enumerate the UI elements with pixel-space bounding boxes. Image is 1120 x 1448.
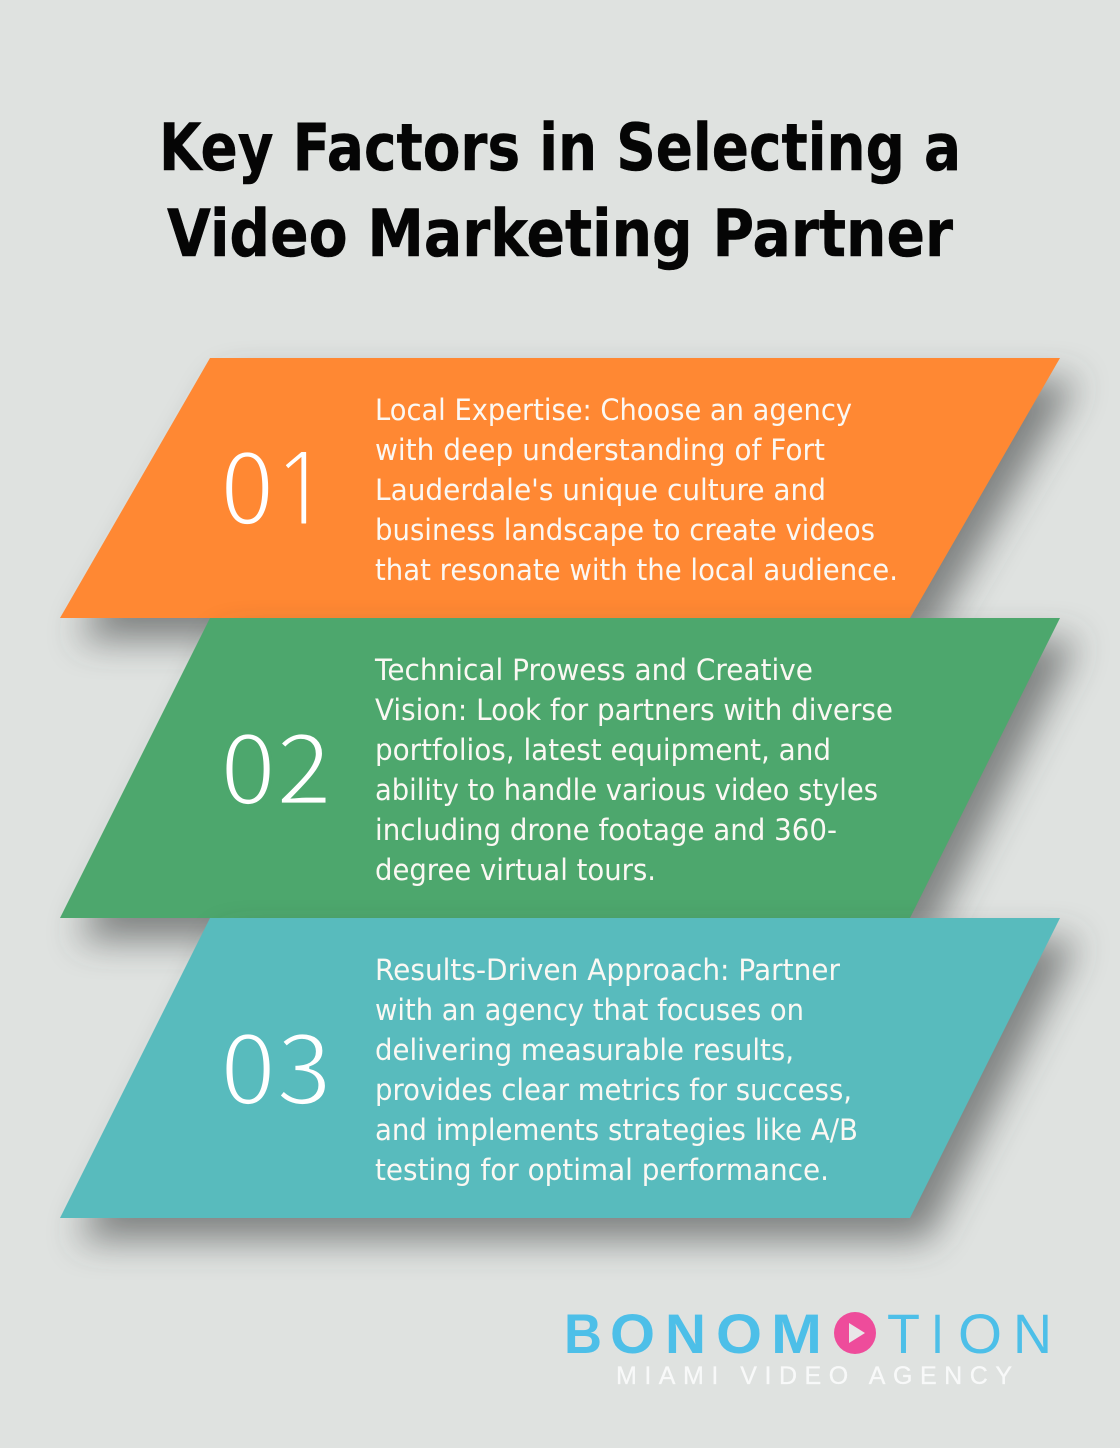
logo: bonomotion: O [716,1302,762,1365]
logo: bonomotion: B [564,1302,602,1365]
logo: bonomotion: O [958,1302,1002,1365]
text: local expertise: Lauderdale's unique culture and [375,473,826,507]
text: results-driven: testing for optimal performance. [375,1153,829,1187]
text: results-driven: provides clear metrics for success, [375,1073,852,1107]
text: results-driven: with an agency that focuses on [375,993,804,1027]
number 01: 1 [271,441,330,539]
text: technical prowess: Vision: Look for partners with diverse [375,693,893,727]
number 03: 03 [220,991,332,1133]
title: Video Marketing Partner [167,197,953,272]
icon: play button [834,1312,876,1354]
text: results-driven: and implements strategies like A/B [375,1113,858,1147]
logo: bonomotion: M [771,1302,822,1365]
logo: bonomotion: O [610,1302,655,1365]
panel: 02 technical prowess [60,618,1078,940]
text: local expertise: with deep understanding of Fort [375,433,825,467]
text: technical prowess: portfolios, latest equipment, and [375,733,831,767]
text: technical prowess: degree virtual tours. [375,853,656,887]
number 01: 0 [220,411,274,553]
number 02: 02 [220,691,332,833]
logo: bonomotion: N [665,1302,706,1365]
logo tagline: MIAMI VIDEO AGENCY [616,1362,1012,1390]
panel: 03 results-driven [60,918,1078,1240]
text: results-driven: Results-Driven Approach: Partner [375,953,840,987]
title: Key Factors in Selecting a [159,111,961,186]
logo: bonomotion: I [931,1302,944,1365]
text: local expertise: business landscape to create videos [375,513,875,547]
logo: bonomotion: N [1013,1302,1052,1365]
text: results-driven [375,953,858,1187]
text: technical prowess: Technical Prowess and Creative [374,653,813,687]
text: local expertise [375,393,898,587]
text: local expertise: Local Expertise: Choose an agency [375,393,852,427]
text: results-driven: delivering measurable results, [375,1033,794,1067]
text: local expertise: that resonate with the local audience. [375,553,898,587]
text: technical prowess [374,653,893,887]
panel: 01 local expertise [60,358,1078,640]
text: technical prowess: including drone footage and 360- [375,813,837,847]
logo: bonomotion: T [887,1302,920,1365]
title [159,111,961,272]
logo: bonomotion [564,1302,1052,1390]
text: technical prowess: ability to handle various video styles [375,773,878,807]
